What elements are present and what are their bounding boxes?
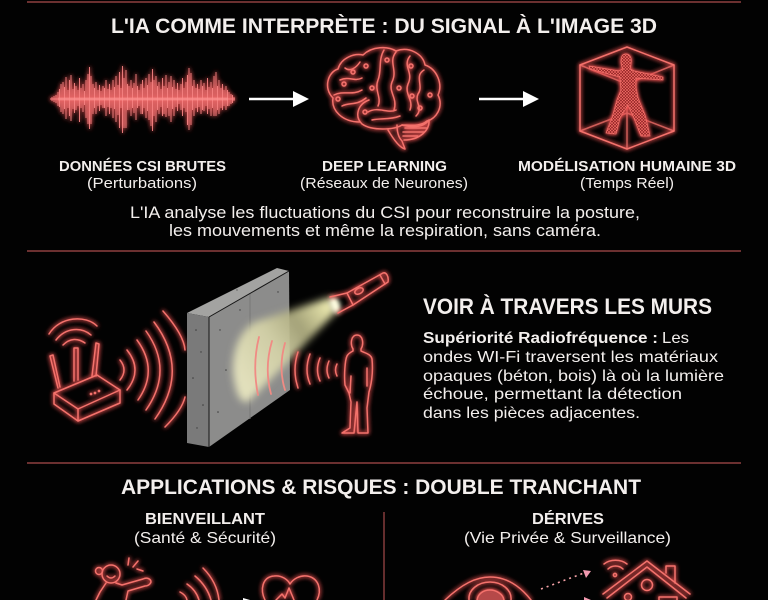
- labels: three pipeline steps: MODÉLISATION HUMAINE 3D: [518, 158, 736, 175]
- icon: concrete wall: [187, 268, 290, 447]
- title: IA interpreter: L'IA COMME INTERPRÈTE : DU SIGNAL À L'IMAGE 3D: [111, 15, 657, 38]
- column heading: drifts: (Vie Privée & Surveillance): [464, 530, 671, 547]
- column heading: benevolent: BIENVEILLANT: [145, 511, 265, 528]
- icon: heart with pulse: [262, 576, 319, 600]
- light beam blocked by wall: [233, 295, 343, 402]
- icon: brain: [328, 48, 440, 149]
- text: radiofrequency superiority: Supériorité Radiofréquence :: [423, 330, 658, 347]
- arrow: waves to heart: [243, 598, 250, 600]
- icon: house under surveillance: [603, 561, 690, 600]
- icon: wifi router: [49, 319, 120, 421]
- labels: three pipeline steps: (Temps Réel): [580, 175, 674, 192]
- column heading: benevolent: [134, 511, 276, 547]
- arrow: deep learning to 3D model: [479, 91, 539, 107]
- icon: person silhouette: [342, 335, 372, 433]
- text: radiofrequency superiority: opaques (béton, bois) là où la lumière: [423, 368, 724, 385]
- arrows: dotted surveillance rays: [541, 570, 591, 600]
- labels: three pipeline steps: (Réseaux de Neurones): [300, 175, 468, 192]
- text: radiofrequency superiority: ondes WI-Fi traversent les matériaux: [423, 349, 718, 366]
- icon: flashlight: [330, 273, 388, 313]
- text: radiofrequency superiority: [423, 330, 724, 422]
- text: radiofrequency superiority: Les: [662, 330, 689, 347]
- heading: applications and risks: APPLICATIONS & RISQUES : DOUBLE TRANCHANT: [121, 476, 641, 499]
- labels: three pipeline steps: DONNÉES CSI BRUTES: [59, 158, 226, 175]
- text: AI explanation: L'IA analyse les fluctuations du CSI pour reconstruire la posture,: [130, 203, 640, 222]
- arrow: signal to deep learning: [249, 91, 309, 107]
- icon: waves heading to wall: [120, 311, 185, 427]
- labels: three pipeline steps: DEEP LEARNING: [322, 159, 447, 175]
- text: radiofrequency superiority: échoue, permettant la détection: [423, 386, 682, 403]
- top divider: [27, 1, 741, 3]
- heading: see through walls: VOIR À TRAVERS LES MURS: [423, 294, 712, 319]
- text: radiofrequency superiority: dans les pièces adjacentes.: [423, 405, 640, 422]
- icon: waves to health: [180, 568, 219, 600]
- icon: surveillance eye: [445, 577, 531, 600]
- column heading: benevolent: (Santé & Sécurité): [134, 530, 276, 547]
- icon: waves through wall and to person: [255, 337, 337, 395]
- icon: 3D human in a cube: [580, 47, 674, 149]
- labels: three pipeline steps: [59, 158, 736, 192]
- icon: falling person: [96, 558, 151, 600]
- column heading: drifts: DÉRIVES: [532, 509, 604, 528]
- icon: raw CSI waveform: [50, 66, 235, 133]
- text: AI explanation: les mouvements et même la respiration, sans caméra.: [169, 221, 601, 240]
- text: AI explanation: [130, 203, 640, 240]
- column heading: drifts: [464, 509, 671, 547]
- labels: three pipeline steps: (Perturbations): [87, 175, 197, 192]
- icon: wifi above house: [604, 560, 627, 577]
